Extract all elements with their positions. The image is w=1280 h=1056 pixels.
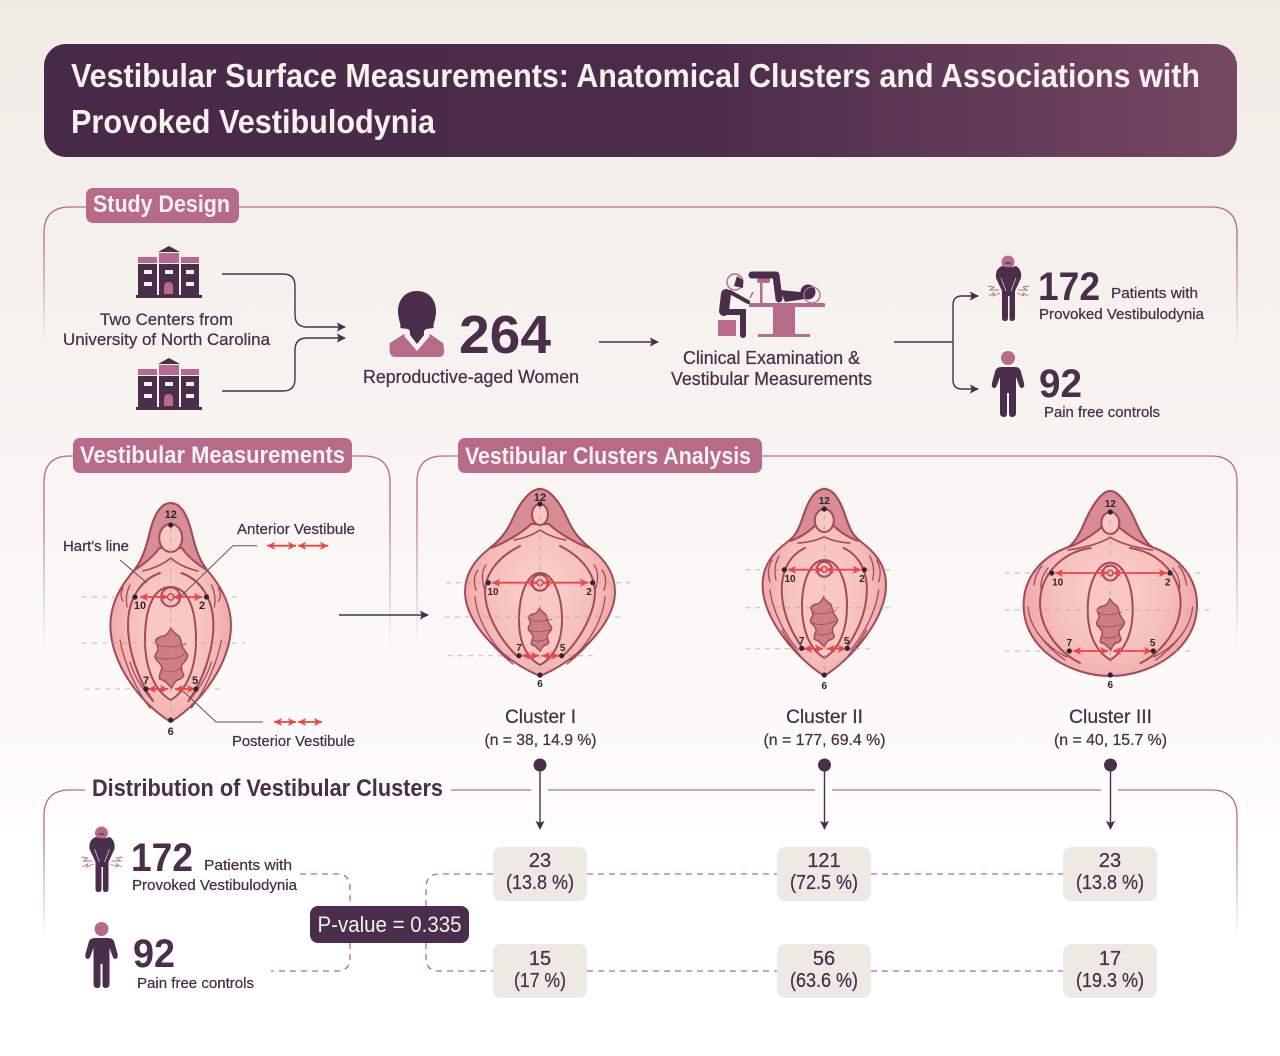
panel: distribution of vestibular clusters <box>44 758 1237 998</box>
data box: cluster III patients <box>1063 847 1157 901</box>
icon: pain free person <box>85 922 118 988</box>
icon: patient with pain <box>988 256 1029 321</box>
label: posterior vestibule: Posterior Vestibule <box>232 734 355 750</box>
diagram: cluster II: 10 <box>784 574 796 585</box>
text: clinical examination: Vestibular Measurements <box>671 369 872 389</box>
icon: clinical examination <box>718 274 825 337</box>
data box: cluster I patients: (13.8 %) <box>506 872 574 894</box>
data box: cluster III controls: (19.3 %) <box>1076 970 1144 992</box>
icon: patient with pain <box>82 826 122 892</box>
diagram: cluster II <box>745 489 890 692</box>
diagram: cluster I: 10 <box>487 587 499 598</box>
diagram: cluster I: 12 <box>534 492 546 504</box>
text: cluster III <box>1054 707 1167 749</box>
text: two centers: Two Centers from <box>100 310 233 329</box>
callout: p-value: P-value = 0.335 <box>318 912 462 937</box>
text: two centers: University of North Carolina <box>63 330 271 349</box>
diagram: cluster III: 12 <box>1105 499 1116 510</box>
text: cluster II <box>764 707 886 749</box>
stat: 92 controls: Pain free controls <box>137 975 254 992</box>
data box: cluster II controls: (63.6 %) <box>790 970 858 992</box>
stat: 92 controls: Pain free controls <box>1044 404 1160 421</box>
diagram: anatomy reference: 12 <box>165 509 177 521</box>
diagram: anatomy reference: 2 <box>199 600 205 612</box>
diagram: cluster II: 5 <box>844 636 850 647</box>
arrow: cluster III down <box>1104 758 1117 829</box>
data box: cluster II patients <box>777 847 871 901</box>
label: hart's line <box>63 539 147 583</box>
diagram: cluster I: 7 <box>516 643 522 654</box>
diagram: anatomy reference: 6 <box>168 726 174 738</box>
arrow: split to groups <box>894 296 978 389</box>
heading: clusters analysis: Vestibular Clusters Analysis <box>465 443 751 470</box>
data box: cluster I patients <box>493 847 587 901</box>
diagram: cluster III: 5 <box>1150 638 1156 649</box>
stat: 172 patients: Patients with <box>1111 285 1198 302</box>
text: cluster I: Cluster I <box>505 707 576 728</box>
callout: p-value <box>310 906 469 943</box>
stat: 92 controls: 92 <box>1039 362 1082 406</box>
arrow: cluster II down <box>818 758 831 829</box>
panel: study design <box>44 188 1237 421</box>
text: cluster III: (n = 40, 15.7 %) <box>1054 732 1167 749</box>
diagram: cluster III: 7 <box>1067 638 1073 649</box>
stat: 92 controls <box>133 932 254 992</box>
diagram: cluster III <box>1005 491 1210 691</box>
data box: cluster I controls: 15 <box>529 948 551 970</box>
text: cluster I: (n = 38, 14.9 %) <box>484 732 596 749</box>
text: cluster III: Cluster III <box>1069 707 1152 728</box>
icon: woman <box>390 291 444 357</box>
diagram: cluster III: 6 <box>1108 680 1114 691</box>
label: anterior vestibule <box>180 522 355 597</box>
label: hart's line: Hart's line <box>63 539 129 555</box>
stat: 172 patients: Provoked Vestibulodynia <box>1039 306 1205 323</box>
diagram: cluster I: 5 <box>560 643 566 654</box>
text: cluster II: (n = 177, 69.4 %) <box>764 732 886 749</box>
diagram: cluster II: 2 <box>859 574 865 585</box>
text: cluster I <box>484 707 596 749</box>
stat: 264 women: Reproductive-aged Women <box>363 367 579 387</box>
stat: 172 patients: 172 <box>1038 265 1100 309</box>
heading: distribution: Distribution of Vestibular Clusters <box>92 775 443 802</box>
stat: 172 patients: Provoked Vestibulodynia <box>132 877 298 894</box>
stat: 264 women: 264 <box>459 305 551 365</box>
diagram: anatomy reference: 7 <box>143 675 149 687</box>
label: anterior vestibule: Anterior Vestibule <box>237 522 355 538</box>
data box: cluster III patients: 23 <box>1099 850 1121 872</box>
diagram: anatomy reference <box>82 503 245 738</box>
diagram: cluster III: 2 <box>1165 578 1171 588</box>
data box: cluster I patients: 23 <box>529 850 551 872</box>
text: clinical examination: Clinical Examination & <box>683 348 860 368</box>
arrows: centers to women <box>222 274 345 391</box>
data box: cluster I controls <box>493 944 587 998</box>
label: posterior vestibule <box>183 691 355 750</box>
text: two centers <box>63 310 271 349</box>
data box: cluster II controls <box>777 944 871 998</box>
icon: pain free person <box>992 351 1024 417</box>
panel: vestibular clusters analysis <box>417 438 1237 749</box>
data box: cluster I controls: (17 %) <box>514 970 566 992</box>
data box: cluster II patients: (72.5 %) <box>790 872 858 894</box>
title banner <box>44 44 1237 157</box>
stat: 172 patients: 172 <box>131 836 193 880</box>
title banner: Vestibular Surface Measurements: Anatomical Clusters and Associations with <box>71 57 1200 94</box>
dashed connectors <box>271 874 1063 971</box>
diagram: cluster I <box>445 489 630 690</box>
stat: 172 patients <box>131 836 298 894</box>
diagram: cluster I: 2 <box>586 587 592 598</box>
diagram: anatomy reference: 5 <box>192 675 198 687</box>
arrow: cluster I down <box>534 758 546 829</box>
stat: 92 controls <box>1039 362 1160 421</box>
title banner: Provoked Vestibulodynia <box>71 103 436 140</box>
heading: study design: Study Design <box>93 191 230 218</box>
arrow: measurements to clusters <box>339 614 428 616</box>
stat: 172 patients <box>1038 265 1205 323</box>
data box: cluster III patients: (13.8 %) <box>1076 872 1144 894</box>
data box: cluster III controls: 17 <box>1099 948 1121 970</box>
diagram: cluster II: 6 <box>822 681 828 692</box>
data box: cluster II patients: 121 <box>807 850 841 872</box>
diagram: cluster II: 7 <box>799 636 805 647</box>
heading: vestibular measurements: Vestibular Measurements <box>80 442 345 469</box>
diagram: cluster III: 10 <box>1052 578 1064 588</box>
icon: hospital top <box>136 246 202 298</box>
panel: vestibular measurements <box>44 438 390 750</box>
diagram: cluster I: 6 <box>537 679 543 690</box>
text: clinical examination <box>671 348 872 389</box>
stat: 172 patients: Patients with <box>204 857 292 874</box>
icon: hospital bottom <box>136 358 202 410</box>
text: cluster II: Cluster II <box>786 707 863 728</box>
stat: 264 women <box>363 305 579 387</box>
diagram: anatomy reference: 10 <box>134 600 146 612</box>
arrow: women to examination <box>599 341 658 343</box>
data box: cluster II controls: 56 <box>813 948 835 970</box>
diagram: cluster II: 12 <box>819 496 830 507</box>
data box: cluster III controls <box>1063 944 1157 998</box>
stat: 92 controls: 92 <box>133 932 175 976</box>
